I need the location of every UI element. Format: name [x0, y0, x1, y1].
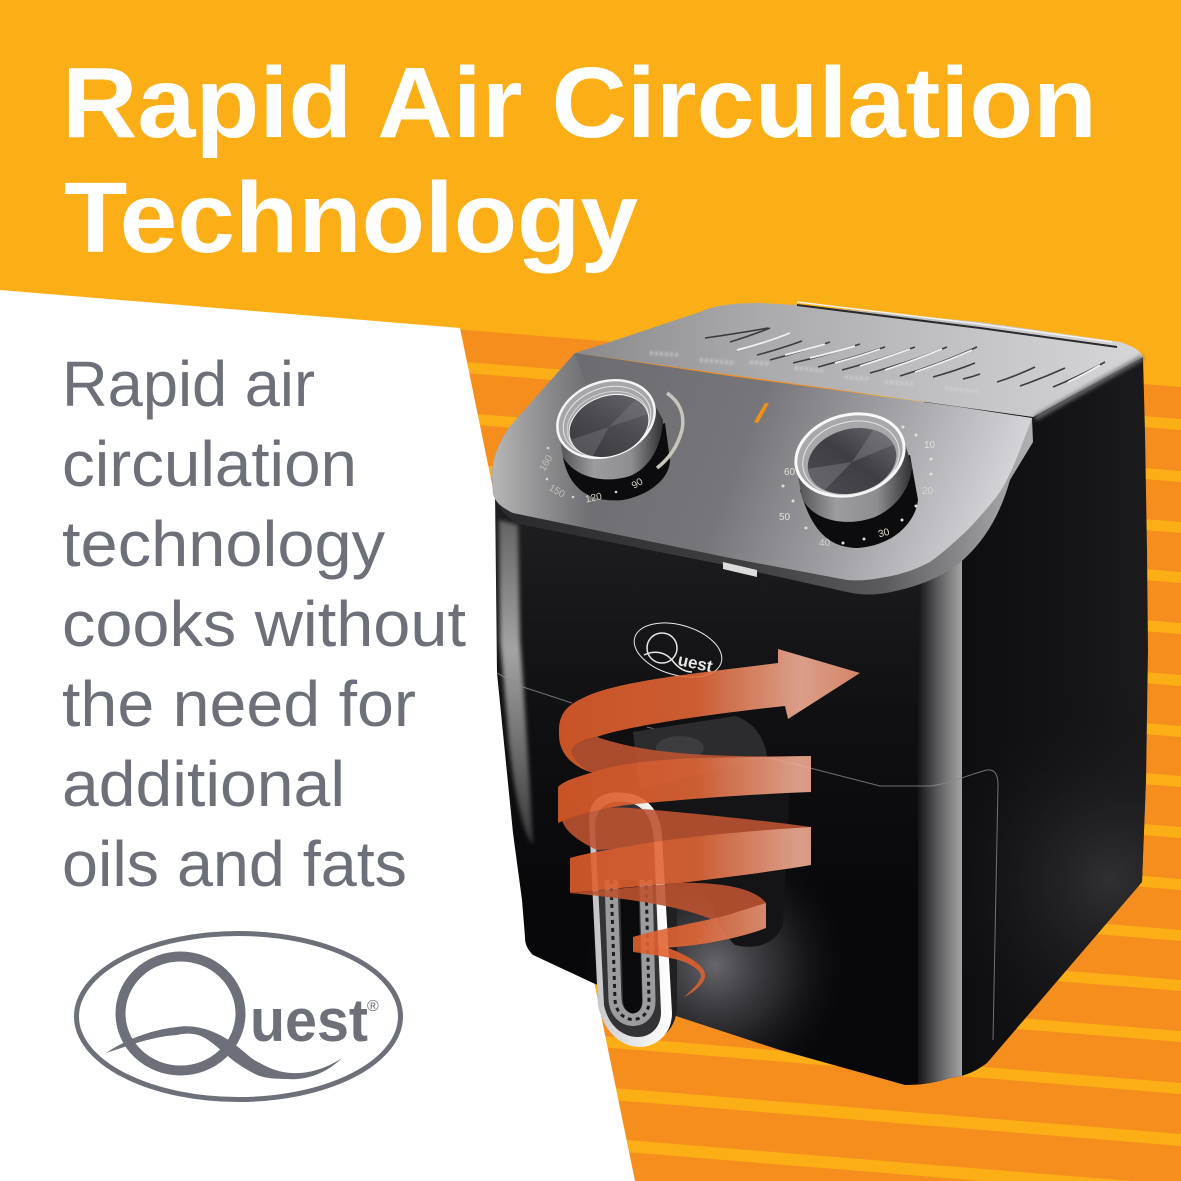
- fryer Quest badge: uest: [676, 650, 715, 676]
- Quest logo: uest: [250, 987, 368, 1054]
- lid lip: [493, 418, 1033, 594]
- left knob: 150: [547, 483, 567, 501]
- control panel: [492, 353, 1032, 580]
- right knob: 10: [924, 440, 936, 451]
- vent slots, light: [737, 333, 1100, 382]
- Quest logo: ®: [367, 998, 379, 1015]
- right knob: 50: [779, 512, 791, 523]
- left knob: 120: [584, 491, 603, 506]
- title: Technology: [64, 162, 638, 274]
- left knob: [540, 379, 684, 502]
- vent slots, dark: [705, 328, 1105, 387]
- body text: cooks without: [62, 588, 466, 660]
- left knob: 160: [538, 453, 556, 473]
- band two: [558, 756, 811, 823]
- rear dark handle housing: [652, 728, 788, 947]
- drawer seam: [497, 673, 998, 1040]
- right knob: 40: [819, 538, 831, 549]
- lid top with vents: [575, 302, 1143, 418]
- body text: the need for: [62, 668, 416, 740]
- airflow spiral arrow: [558, 649, 860, 997]
- right knob: [779, 402, 936, 549]
- title: Rapid Air Circulation: [62, 47, 1097, 159]
- back bands: [572, 737, 811, 772]
- body text: Rapid air: [62, 348, 315, 420]
- left knob: 90: [630, 476, 645, 492]
- Quest logo: [76, 934, 400, 1100]
- body text: circulation: [62, 428, 357, 500]
- air fryer: [480, 302, 1158, 1100]
- band three: [570, 827, 811, 893]
- fryer body: [480, 340, 1158, 1100]
- band four: [633, 903, 766, 952]
- white text panel: [0, 290, 635, 1181]
- right knob: 20: [922, 486, 934, 497]
- basket handle: [589, 792, 677, 1047]
- tail: [633, 947, 705, 997]
- band with arrow head: [559, 649, 860, 772]
- vent speckle row: [650, 353, 980, 392]
- glossy corner, left: [499, 520, 533, 845]
- right knob: 30: [877, 527, 891, 540]
- body text: technology: [62, 508, 385, 580]
- body text: [62, 348, 466, 900]
- right knob: 60: [784, 467, 796, 478]
- orange stripe field: [440, 328, 1181, 1181]
- fryer Quest badge: [628, 614, 728, 686]
- body text: oils and fats: [62, 828, 407, 900]
- glossy corner, right: [918, 560, 962, 1090]
- orange indicator light: [754, 403, 769, 423]
- body text: additional: [62, 748, 345, 820]
- title: [62, 47, 1097, 274]
